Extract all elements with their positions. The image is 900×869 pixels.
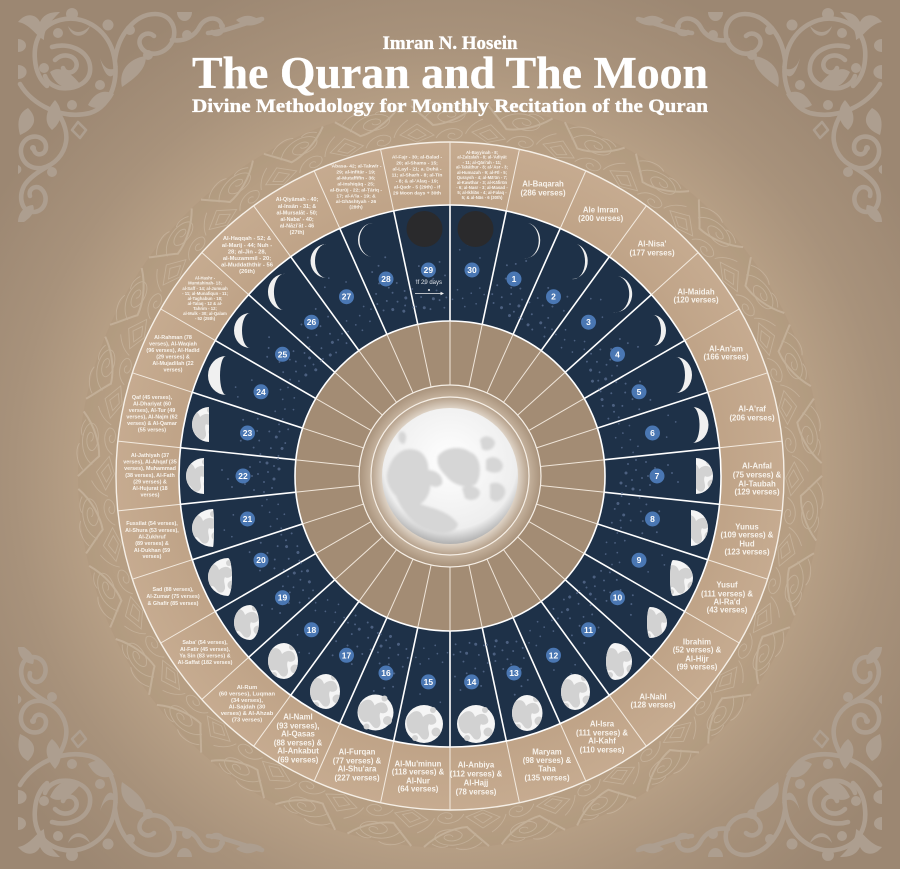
moon phase 19: [234, 605, 259, 640]
surah label 19: Saba' (54 verses),: [182, 640, 228, 646]
surah label 29: al-Layl - 21; a. Duhā -: [393, 167, 442, 173]
number 11: 11: [584, 625, 593, 635]
surah label 17: Al-Qasas: [281, 730, 316, 739]
surah label 29: - 8; & al-'Alaq - 19;: [396, 179, 439, 185]
surah label 7: (129 verses): [734, 488, 780, 497]
moon phase 1: [523, 223, 540, 258]
moon phase 25: [234, 313, 250, 348]
surah label 30: al-Humazah - 9; al-Fīl - 5;: [457, 170, 508, 175]
moon phase 6: [692, 407, 708, 443]
surah label 19: Al-Fatir (45 verses),: [180, 647, 231, 653]
moon phase 18: [268, 643, 298, 679]
surah label 14: (78 verses): [456, 788, 497, 797]
surah label 25: al-Mulk - 30; al-Qalam: [183, 311, 227, 316]
surah label 17: (88 verses) &: [274, 738, 323, 747]
surah label 7: (75 verses) &: [733, 471, 782, 480]
surah label 22: (38 verses), Al-Fath: [125, 473, 175, 479]
surah label 29: 20; al-Shams - 15;: [396, 161, 438, 167]
surah label 17: Al-Ankabut: [277, 747, 319, 756]
day 11: [552, 592, 632, 680]
surah label 30: Quraysh - 4; al-Mā'ūn - 7;: [457, 175, 508, 180]
number 21: 21: [243, 514, 252, 524]
moon phase 20: [208, 558, 232, 596]
number 3: 3: [586, 317, 591, 327]
surah label 27: al-Naba' - 40;: [280, 217, 314, 223]
surah label 22: verses), Muhammad: [124, 466, 176, 472]
surah label 22: (29 verses) &: [133, 480, 167, 486]
surah label 23: Qaf (45 verses),: [132, 395, 173, 401]
surah label 24: (96 verses), Al-Hadid: [146, 348, 200, 354]
surah label 15: (64 verses): [398, 785, 439, 794]
number 14: 14: [467, 677, 477, 687]
surah label 28: 'Abasa- 42; al-Takwīr -: [330, 164, 382, 170]
number 7: 7: [655, 471, 660, 481]
moon phase 2: [572, 244, 588, 279]
moon phase 7: [696, 458, 713, 494]
number 22: 22: [238, 471, 248, 481]
surah label 18: verses) & Al-Ahzab: [221, 711, 274, 717]
surah label 30: - 11; al-Qāri'ah - 11;: [463, 160, 502, 165]
number 25: 25: [278, 349, 287, 359]
surah label 17: Al-Naml: [283, 713, 313, 722]
surah label 12: (110 verses): [580, 746, 625, 755]
surah label 22: verses), Al-Ahqaf (35: [123, 460, 177, 466]
moon phase 8: [691, 510, 708, 546]
number 2: 2: [551, 292, 556, 302]
number 6: 6: [650, 428, 655, 438]
surah label 21: Fussilat (54 verses),: [126, 521, 178, 527]
outer surah ring: [116, 142, 784, 810]
surah label 30: 5; al-Ikhlās - 4; al-Falaq -: [457, 190, 507, 195]
day 6: [613, 407, 708, 455]
ornament: top left: [18, 8, 262, 222]
surah label 2: Ale Imran: [583, 206, 619, 215]
surah label 29: Al-Fajr - 30; al-Balad -: [392, 155, 443, 161]
day 18: [268, 599, 345, 679]
day 19: [234, 562, 314, 640]
surah label 17: (93 verses),: [277, 721, 319, 730]
surah label 27: al-Insān - 31; &: [278, 204, 316, 210]
surah label 5: (166 verses): [703, 353, 749, 362]
moon phase 14: [457, 705, 495, 743]
moon phase 26: [268, 274, 285, 310]
day 30: [452, 211, 494, 308]
surah label 14: (112 verses) &: [450, 770, 503, 779]
day 26: [268, 274, 349, 363]
surah label 22: verses): [141, 492, 160, 498]
surah label 20: Al-Zumar (75 verses): [146, 594, 200, 600]
moon phase 12: [561, 674, 590, 710]
day 22: [186, 458, 280, 494]
surah label 14: Al-Hajj: [464, 779, 488, 788]
surah label 26: al-Muddaththir - 56: [221, 262, 274, 268]
surah label 23: verses), Al-Tur (49: [129, 408, 175, 414]
surah label 30: al-Zalzalah - 8; al-'Adiyāt: [457, 154, 507, 160]
surah label 23: (55 verses): [138, 428, 166, 434]
surah label 26: al-Marij - 44; Nuh -: [222, 243, 272, 249]
note: if 29 days: If 29 days: [416, 280, 442, 286]
moon phase 24: [208, 356, 226, 395]
central full moon: [382, 408, 518, 544]
surah label 27: Al-Qiyāmah - 40;: [276, 197, 318, 203]
surah label 1: Al-Baqarah: [522, 180, 564, 189]
moon phase 28: [358, 223, 373, 257]
day 5: [596, 357, 692, 422]
surah label 18: Al-Sajdah (30: [229, 704, 265, 710]
surah label 13: (135 verses): [524, 774, 570, 783]
day 21: [192, 498, 286, 547]
surah label 18: (60 verses), Luqman: [219, 692, 275, 698]
surah label 16: Al-Shu'ara: [338, 765, 377, 774]
moon phase 5: [676, 357, 692, 393]
surah label 8: (109 verses) &: [721, 531, 774, 540]
surah label 24: verses), Al-Waqiah: [149, 342, 197, 348]
day 24: [208, 356, 301, 421]
moon phase 4: [653, 315, 666, 346]
surah labels: [123, 150, 782, 797]
number 13: 13: [509, 668, 519, 678]
surah label 3: Al-Nisa': [638, 240, 667, 249]
number 28: 28: [381, 274, 391, 284]
day 3: [552, 276, 632, 360]
surah label 3: (177 verses): [629, 249, 675, 258]
number 24: 24: [256, 387, 266, 397]
surah label 22: Al-Jathiyah (37: [131, 453, 169, 459]
surah label 6: Al-A'raf: [738, 405, 766, 414]
surah label 8: Hud: [739, 540, 755, 549]
moon phase 13: [512, 695, 542, 731]
surah label 28: al-Ghāshīyah - 26: [336, 199, 377, 205]
surah label 15: Al-Nur: [406, 777, 430, 786]
number 20: 20: [256, 555, 266, 565]
moon phase 3: [613, 276, 632, 312]
moon phase 10: [647, 607, 667, 638]
wheel rings: [116, 142, 784, 810]
surah label 13: Taha: [538, 765, 556, 774]
surah label 27: al-Nāzi'āt - 46: [280, 224, 314, 230]
surah label 2: (200 verses): [578, 214, 624, 223]
moon phases and day numbers: [172, 211, 724, 743]
surah label 25: al-Talaq - 12 & al-: [188, 301, 223, 306]
surah label 30: al-Kawthar - 3; al-Kāfirūn: [457, 180, 508, 185]
surah label 30: Al-Bayyinah - 8;: [466, 150, 499, 155]
day 10: [578, 570, 667, 638]
surah label 19: Al-Saffat (182 verses): [178, 660, 233, 666]
surah label 23: Al-Dhariyat (60: [133, 402, 171, 408]
surah label 26: 28; al-Jin - 28,: [228, 250, 267, 256]
surah label 7: Al-Taubah: [738, 480, 776, 489]
surah label 28: al-Inshiqāq - 25;: [337, 182, 375, 188]
arrow: [415, 289, 444, 295]
surah label 13: Maryam: [532, 748, 562, 757]
surah label 9: (43 verses): [707, 606, 748, 615]
ornament: bottom right: [638, 647, 882, 861]
ornament: top right: [638, 8, 882, 222]
day 9: [604, 532, 693, 596]
number 4: 4: [615, 349, 620, 359]
surah label 1: (286 verses): [520, 188, 566, 197]
title block: [192, 34, 709, 117]
subtitle: Divine Methodology for Monthly Recitation of the Quran: [192, 96, 709, 117]
surah label 13: (98 verses) &: [523, 756, 572, 765]
halo around central moon: [359, 385, 541, 567]
surah label 30: - 6; al-Nasr - 3; al-Masad -: [456, 185, 508, 190]
surah label 7: Al-Anfal: [742, 462, 772, 471]
surah label 28: 17; al-A'la - 19; &: [336, 193, 376, 199]
surah label 25: Al-Hashr -: [195, 276, 216, 280]
surah label 23: verses) & Al-Qamar: [127, 421, 178, 427]
surah label 21: Al-Dukhan (59: [134, 548, 170, 554]
surah label 15: Al-Mu'minun: [395, 760, 442, 769]
surah label 4: (120 verses): [673, 296, 719, 305]
day 4: [579, 315, 666, 389]
day 1: [488, 223, 540, 319]
surah label 25: - 52 (25th): [195, 316, 216, 321]
moon phase 9: [670, 560, 693, 596]
day 17: [310, 614, 379, 709]
surah label 12: Al-Isra: [590, 720, 615, 729]
surah label 24: Al-Rahman (78: [154, 335, 192, 341]
day 28: [358, 223, 413, 318]
surah label 21: Al-Zukhruf: [138, 535, 166, 541]
day 27: [311, 244, 378, 337]
surah label 18: Al-Rum: [237, 685, 257, 691]
surah label 26: Al-Haqqah - 52; &: [223, 236, 271, 242]
day 23: [192, 407, 290, 457]
surah label 29: 11; al-Sharh - 8; al-Tīn: [392, 173, 442, 179]
surah label 17: (69 verses): [278, 755, 319, 764]
number 26: 26: [307, 317, 316, 327]
surah label 25: al-Taghabun - 18;: [188, 296, 223, 301]
surah label 24: Al-Mujadilah (22: [152, 361, 194, 367]
moon phase 23: [192, 407, 209, 442]
surah label 29: al-Qadr - 5 (29th) - if: [394, 185, 440, 191]
day 8: [610, 495, 708, 546]
surah label 18: (73 verses): [232, 718, 262, 724]
surah label 9: Yusuf: [716, 581, 738, 590]
moon phase 15: [405, 705, 443, 743]
surah label 16: Al-Furqan: [339, 748, 376, 757]
surah label 30: 5; & al-Nās - 6 (30th): [462, 195, 503, 200]
surah label 20: & Ghafir (85 verses): [148, 601, 199, 607]
number 27: 27: [342, 292, 351, 302]
number 12: 12: [549, 650, 558, 660]
surah label 10: (52 verses) &: [673, 646, 722, 655]
dark new moon 30: [458, 211, 494, 247]
surah label 28: al-Burūj - 22; al-Ṭāriq -: [330, 188, 382, 194]
surah label 18: (34 verses),: [231, 698, 263, 704]
navy moon phase ring: [179, 205, 721, 747]
number 18: 18: [307, 625, 316, 635]
surah label 9: Al-Ra'd: [714, 598, 741, 607]
surah label 29: 29 Moon days + 30th: [393, 191, 441, 197]
author: Imran N. Hosein: [382, 34, 518, 54]
day 14: [452, 641, 495, 743]
day 13: [486, 639, 542, 731]
surah label 11: (128 verses): [630, 701, 676, 710]
surah label 16: (77 verses) &: [333, 757, 382, 766]
surah label 9: (111 verses) &: [701, 590, 753, 599]
surah label 25: Mumtahinah- 13;: [188, 281, 222, 286]
moon phase 22: [186, 458, 204, 494]
day 25: [234, 313, 322, 388]
moon phase 17: [310, 674, 340, 709]
surah label 21: (89 verses) &: [135, 541, 169, 547]
number 10: 10: [613, 593, 622, 603]
surah label 24: verses): [164, 368, 183, 374]
number 15: 15: [424, 677, 433, 687]
surah label 28: 29; al-Infitār - 19;: [336, 170, 376, 176]
surah label 15: (118 verses) &: [392, 768, 445, 777]
surah label 23: verses), Al-Najm (62: [126, 414, 178, 420]
surah label 28: (28th): [349, 204, 363, 210]
number 29: 29: [424, 265, 433, 275]
moon phase 16: [358, 694, 394, 730]
surah label 10: Al-Hijr: [685, 655, 709, 664]
number 9: 9: [637, 555, 642, 565]
surah label 26: al-Muzammil - 20;: [223, 256, 271, 262]
number 23: 23: [243, 428, 252, 438]
surah label 20: Sad (88 verses),: [152, 587, 194, 593]
day 20: [208, 532, 300, 596]
surah label 6: (206 verses): [729, 414, 775, 423]
moon phase 21: [192, 509, 214, 547]
surah label 14: Al-Anbiya: [458, 761, 495, 770]
day 16: [358, 633, 412, 730]
surah label 25: - 11; al-Munafiqun - 11;: [182, 291, 228, 296]
day 15: [405, 644, 448, 743]
surah label 11: Al-Nahl: [639, 693, 667, 702]
surah label 24: (29 verses) &: [156, 354, 190, 360]
surah label 12: Al-Kahf: [588, 737, 616, 746]
number 19: 19: [278, 593, 287, 603]
number 16: 16: [381, 668, 391, 678]
surah label 21: verses): [143, 554, 162, 560]
number 1: 1: [512, 274, 517, 284]
moon phase 11: [606, 643, 632, 680]
surah label 12: (111 verses) &: [576, 729, 628, 738]
surah label 10: (99 verses): [677, 663, 718, 672]
surah label 22: Al-Hujurat (18: [132, 486, 168, 492]
number 5: 5: [637, 387, 642, 397]
surah label 28: al-Mutaffifīn - 36;: [336, 176, 376, 182]
day 12: [528, 620, 590, 710]
surah label 16: (227 verses): [334, 774, 380, 783]
surah label 21: Al-Shura (53 verses),: [125, 528, 179, 534]
surah label 26: (26th): [239, 269, 255, 275]
ornament: bottom left: [18, 647, 262, 861]
surah label 8: Yunus: [735, 523, 759, 532]
surah label 25: Tahrim - 12;: [193, 306, 217, 311]
number 8: 8: [650, 514, 655, 524]
surah label 4: Al-Maidah: [677, 288, 715, 297]
ornamental band around the wheel: [73, 99, 827, 853]
number 17: 17: [342, 650, 351, 660]
moon phase 27: [311, 244, 327, 278]
main title: The Quran and The Moon: [192, 47, 708, 98]
surah label 8: (123 verses): [724, 548, 770, 557]
surah label 27: (27th): [290, 230, 305, 236]
day 2: [518, 244, 588, 339]
surah label 30: al-Takāthur - 8; al-'Asr - 3;: [456, 164, 509, 170]
surah label 10: Ibrahim: [683, 638, 711, 647]
inner brown ring: [295, 321, 605, 631]
number 30: 30: [467, 265, 477, 275]
surah label 5: Al-An'am: [709, 345, 743, 354]
surah label 27: al-Mursalāt - 50;: [276, 210, 318, 216]
surah label 25: al-Saff - 14; al-Jumuah: [182, 286, 228, 291]
dark new moon 29: [406, 211, 442, 247]
day 7: [620, 458, 713, 494]
surah label 19: Ya Sin (83 verses) &: [179, 654, 231, 660]
day 29: [406, 211, 448, 311]
